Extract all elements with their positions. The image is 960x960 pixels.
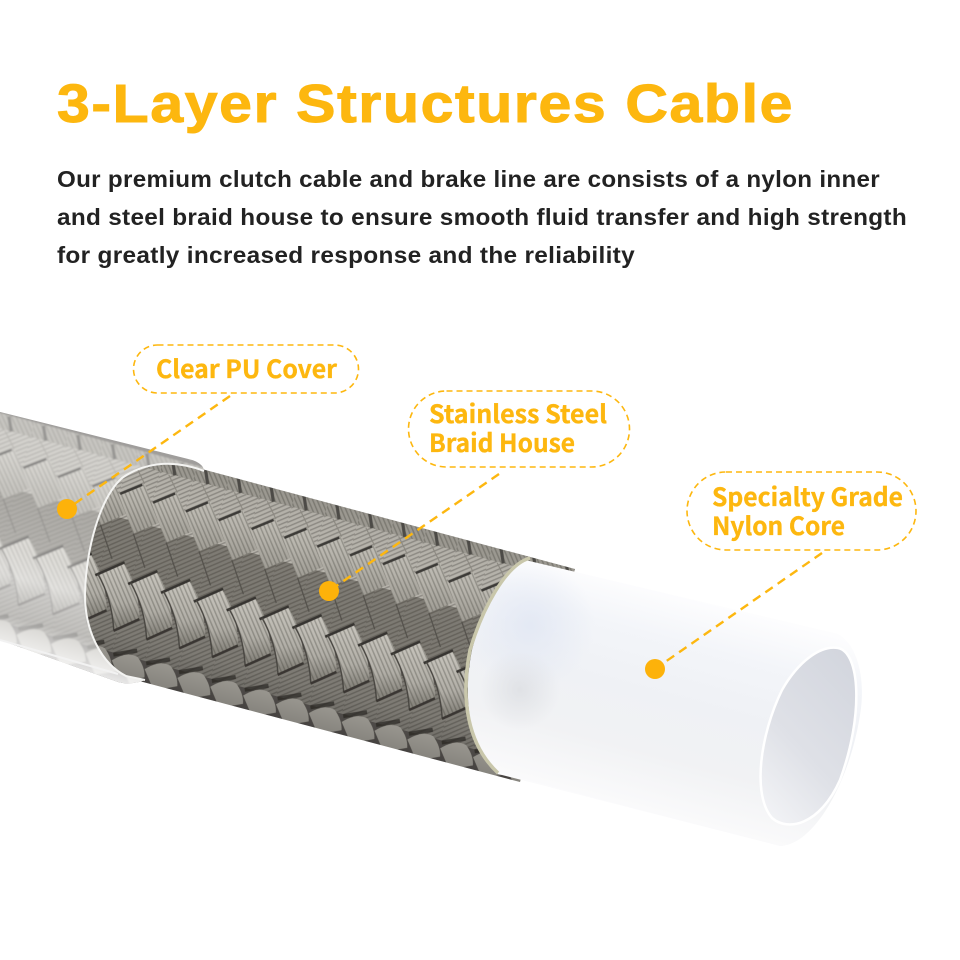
callout: Stainless Steel Braid House: Braid House xyxy=(429,424,575,460)
tube opening xyxy=(761,648,856,824)
callout: Clear PU Cover xyxy=(57,345,358,519)
intro text block: Our premium clutch cable and brake line are consists of a nylon inner xyxy=(57,166,880,192)
stainless steel braid layer xyxy=(86,464,575,782)
callout: Stainless Steel Braid House: Stainless Steel xyxy=(429,395,607,431)
clear PU cover layer xyxy=(0,412,204,684)
intro text block: and steel braid house to ensure smooth fluid transfer and high strength xyxy=(57,204,907,230)
intro text block xyxy=(57,166,907,268)
callout: Specialty Grade Nylon Core xyxy=(645,472,916,679)
callout: Specialty Grade Nylon Core: Specialty Grade xyxy=(712,478,903,514)
intro text block: for greatly increased response and the reliability xyxy=(57,242,635,268)
collar ring xyxy=(466,558,530,773)
callout: Clear PU Cover: Clear PU Cover xyxy=(156,350,337,386)
title: 3-Layer Structures Cable xyxy=(57,74,794,134)
callout: Specialty Grade Nylon Core: Nylon Core xyxy=(712,507,845,543)
cable illustration xyxy=(0,400,862,846)
nylon core layer xyxy=(466,558,862,846)
callout: Stainless Steel Braid House xyxy=(319,391,630,601)
